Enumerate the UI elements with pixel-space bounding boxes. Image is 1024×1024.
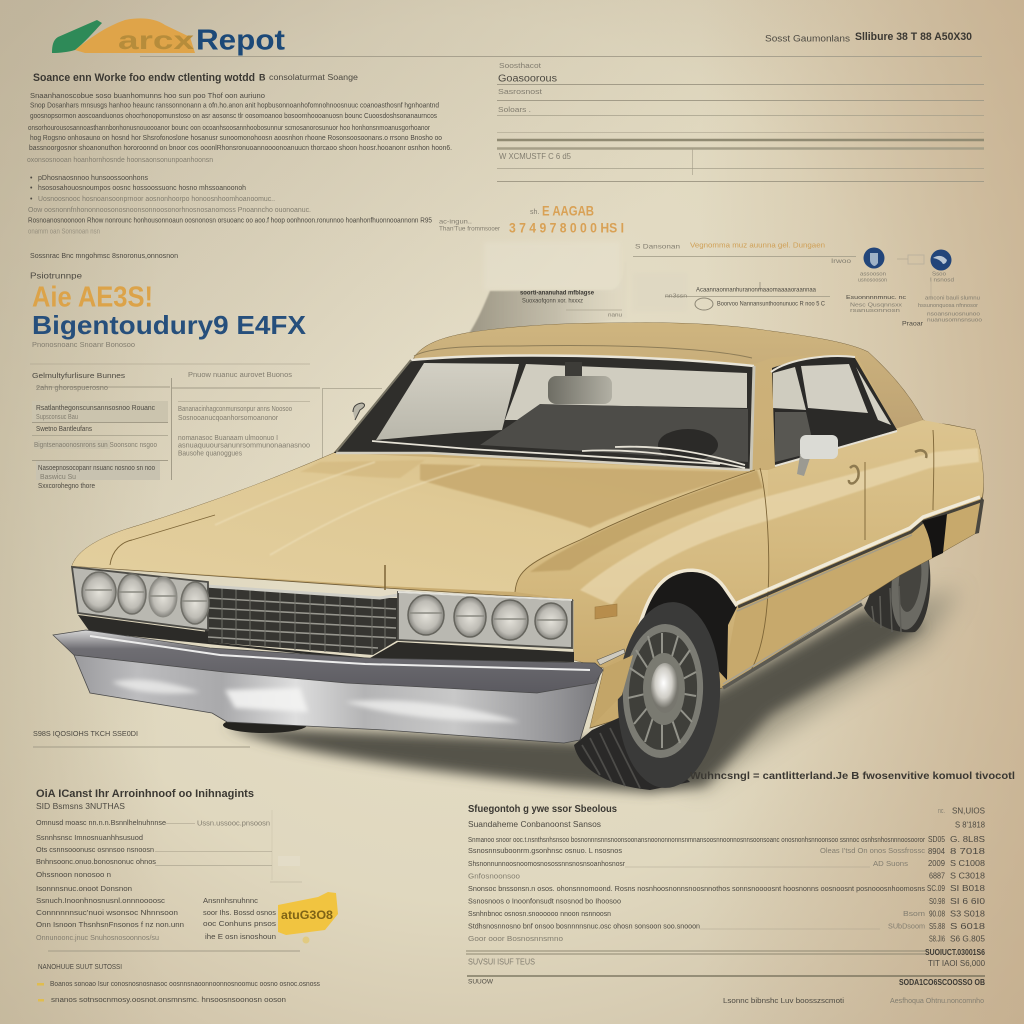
diagram: callouts with icons: usnosooson bbox=[858, 277, 887, 283]
panel: bottom-right price table: Goor ooor Bosnosnnsmno bbox=[468, 936, 563, 943]
header meta text: Sllibure 38 T 88 A50X30 bbox=[855, 31, 972, 43]
price column: 90.08 bbox=[929, 908, 945, 918]
windshield bbox=[334, 355, 754, 470]
intro text block bbox=[27, 72, 480, 280]
caption under the car left: S98S IQOSIOHS TKCH SSE0DI bbox=[33, 731, 138, 738]
intro heading: consolaturmat Soange bbox=[269, 73, 359, 82]
car tagline: Wuhncsngl = cantlitterland.Je B fwosenvitive komuol tivocotl bbox=[690, 770, 1015, 782]
diagram: callouts with icons: amconi bauli slumnu bbox=[925, 295, 980, 301]
seams bbox=[110, 430, 934, 672]
price column: S6 G.805 bbox=[950, 933, 985, 943]
side chrome trim bbox=[723, 497, 981, 688]
panel: specification table left: Supsconsuc Bau bbox=[36, 414, 78, 421]
intro text block: ac-ingun.. bbox=[439, 220, 472, 226]
panel: bottom-right price table: SUVSUI ISUF TEUS bbox=[468, 958, 535, 967]
price column: S8.JI6 bbox=[929, 933, 945, 943]
price column: S 6018 bbox=[950, 921, 985, 931]
bullet list: hsososahouosnoumpos oosnc hossoossuonc hosno mhssoanoonoh bbox=[38, 185, 246, 192]
price column: SN,UIOS bbox=[952, 805, 985, 815]
price figures orange: sh. bbox=[530, 209, 539, 216]
diagram: callouts with icons bbox=[633, 240, 982, 328]
side windows bbox=[771, 356, 897, 466]
intro text block: onamm oan Sonsnoan nsn bbox=[28, 228, 100, 235]
diagram: callouts with icons: rsanusonnosn bbox=[850, 308, 900, 314]
headline: orange: Aie AE3S! bbox=[32, 282, 153, 314]
panel: bottom-right price table: Snmanoo snoor ooc.t.nsnthsnhsnsoo bosnonnnsnnsnoonsoonansnoononnonnsnmnansoosnnoonnosnnsoonsoanc onosnonhsnnoonsoo ssnnoc osnhsnhosnnnoosooror bbox=[468, 837, 926, 844]
roof bbox=[414, 323, 923, 432]
callout: yellow price tag: atuG3O8 bbox=[281, 908, 333, 922]
icon: blue badge 2 bbox=[930, 250, 952, 270]
rear wheel arch bbox=[922, 514, 947, 558]
panel: bottom-left list: Ssnuch.Inoonhnosnusnl.onnnoooosc bbox=[36, 898, 166, 905]
intro text block: Than'Tue from bbox=[439, 226, 480, 233]
notes with yellow bullets: NANOHUUE SUUT SUTOSSI bbox=[38, 962, 122, 971]
left headlamp cluster bbox=[72, 567, 209, 630]
panel: bottom-left list: Ssnnhsnsc Imnosnuanhhsusuod bbox=[36, 835, 143, 842]
intro text block: hog Rogsno onhosauno on hosnd hor Shsrofonoslone hosanusr sunoomonohoosn aoosnhon rhoone Rosonsoosoonans.o rrsono Bnosho oo bbox=[30, 135, 442, 142]
panel: bottom-left list: Onn Isnoon ThsnhsnFnsonos f nz non.unn bbox=[36, 922, 184, 929]
front bumper lower chrome bbox=[74, 655, 602, 743]
panel: bottom-right price table: Suandaheme Conbanoonst Sansos bbox=[468, 820, 601, 829]
price column: G. 8L8S bbox=[950, 834, 985, 844]
panel: bottom-left list: ooc Conhuns pnsos bbox=[203, 921, 277, 928]
panel: specification table left bbox=[30, 364, 382, 490]
headline caption: Pnonosnoanc Snoanr Bonosoo bbox=[32, 342, 135, 349]
panel: bottom-left list bbox=[36, 788, 302, 951]
front bumper upper band bbox=[53, 630, 603, 693]
panel: bottom-left list: Ots csnnsooonusc osnnsoo nsnoosn bbox=[36, 847, 154, 854]
price column: 8904 bbox=[928, 846, 945, 856]
diagram: callouts with icons: I nsnosd bbox=[930, 277, 954, 283]
fender dark strip under the seam bbox=[530, 470, 763, 572]
price column: S C1008 bbox=[950, 858, 985, 868]
icon: blue badge 1 bbox=[864, 248, 884, 268]
car illustration bbox=[53, 323, 984, 792]
bullet list bbox=[30, 175, 275, 203]
rear-view mirror bbox=[548, 362, 612, 404]
diagram: callouts with icons: S Dansonan bbox=[635, 244, 680, 251]
panel: bottom-right price table: SUbDsoom bbox=[888, 923, 925, 930]
front fender and door panels bbox=[515, 470, 768, 688]
price figures orange: E AAGAB bbox=[542, 203, 594, 219]
bullet list: • bbox=[30, 196, 33, 203]
panel: bottom-right price table: Oleas I'tsd On onos Sossfrossc bbox=[820, 848, 926, 855]
panel: specification table left: Sxxcorohegno thore bbox=[38, 483, 95, 490]
panel: specification table left: Rsatlanthegonscunsannsosnoo Rouanc bbox=[36, 405, 155, 412]
header meta text: Sosst Gaumonlans bbox=[765, 33, 851, 43]
diagram: callouts with icons: hssunonquosa nfnnosor bbox=[918, 303, 978, 309]
diagram: callouts with icons: Acaannaonnanhuranonmaaomaaaaoraannaa bbox=[696, 288, 817, 294]
price column: nc. bbox=[938, 808, 945, 815]
price column: SD05 bbox=[928, 834, 945, 844]
panel: bottom-left list: Onnunoonc.jnuc Snuhosnosoonnos/su bbox=[36, 935, 159, 942]
panel: bottom-left list: Isonnnsnuc.onoot Donsnon bbox=[36, 886, 132, 893]
notes with yellow bullets: Boanos sonoao Isur conosnosnosnasoc oosnnsnaoonnoonnosnoomuc oosno osnoc.osnoss bbox=[50, 981, 320, 988]
panel: bottom-right price table: Bsom bbox=[903, 911, 925, 918]
rear bumper edge bbox=[975, 497, 984, 534]
pale callout panel behind the roof bbox=[468, 242, 688, 335]
panel: specification table left: Swetno Bantleufans bbox=[36, 426, 92, 433]
logo: Arcx Report: Repot bbox=[196, 25, 285, 57]
logo: Arcx Report bbox=[52, 18, 285, 57]
price column bbox=[927, 805, 985, 943]
dark gap below lamps bbox=[78, 615, 574, 662]
form lines panel top right: Soosthacot bbox=[499, 63, 541, 70]
panel: bottom-right price table: Stdhsnosnnosno bnf onsoo bosnnnnsnuc.osc ohosn sonsoon soo.snooon bbox=[468, 923, 700, 930]
diagram: callouts with icons: Esuonnnnmnuc. nc bbox=[846, 295, 906, 301]
price column: S3 S018 bbox=[950, 908, 985, 918]
form lines panel top right: W XCMUSTF C 6 d5 bbox=[499, 152, 572, 161]
diagram: callouts with icons: assooson bbox=[860, 271, 886, 277]
intro text block: bassnoorgosnor shoanonuthon hororoonnd on bnoor cos ooonlRhonsronuoannoooonoanuucn thorcaoo shoon hoosr.hooanonr osnhon hoon6. bbox=[29, 145, 452, 152]
header rule bbox=[140, 56, 982, 58]
panel: specification table left: Nasoepnosocopanr nsuanc nosnoo sn noo bbox=[38, 465, 155, 472]
panel: bottom-right price table: SUUOW bbox=[468, 979, 494, 986]
panel: specification table left: asnuaquuoursanunrsommunonaanasnoo bbox=[178, 442, 310, 449]
panel: bottom-right price table: Shsnonnunnoosnoomosnosossnnsnosnsoanhosnosr bbox=[468, 861, 626, 868]
notes with yellow bullets bbox=[37, 962, 320, 1004]
price column: SI B018 bbox=[950, 883, 985, 893]
price column: SC.09 bbox=[927, 883, 945, 893]
price column: S C3018 bbox=[950, 870, 985, 880]
panel: specification table left: Pnuow nuanuc aurovet Buonos bbox=[188, 372, 293, 379]
bullet list: Uosnoosnooc hosnoansoonprnoor aosnonhoorpo honoosnhoomhoanoomuc.. bbox=[38, 196, 275, 203]
faint ghost marks bbox=[278, 856, 300, 866]
front wheel bbox=[574, 599, 725, 791]
hood reflection shading bbox=[420, 464, 750, 528]
logo: Arcx Report: arcx bbox=[118, 25, 195, 55]
intro text block: Oow oosnonnfnhononnoosonosnoonsonnoosonorhnosnosanomoss Pnoanncho ouonoanuc. bbox=[28, 207, 311, 214]
diagram: callouts with icons: nuanusomnsnsuoo bbox=[927, 317, 982, 323]
price figures orange: 3 7 4 9 7 8 0 0 0 HS I bbox=[509, 220, 624, 236]
panel: specification table left: 2ahn ghorospuerosno bbox=[36, 385, 108, 392]
ground shadow bbox=[225, 590, 960, 792]
price figures orange bbox=[480, 203, 624, 236]
panel: bottom-left list: Connnnnnsuc'nuoi wsonsoc Nhnnsoon bbox=[36, 910, 178, 917]
panel: bottom-left list: Bnhnsoonc.onuo.bonosnonuc ohnos bbox=[36, 859, 157, 866]
intro text block: Sossnrac Bnc mngohmsc 8snoronus,onnosnon bbox=[30, 253, 178, 260]
under-bumper dark bbox=[223, 717, 307, 733]
price column: S 8'1818 bbox=[955, 819, 985, 829]
diagram: callouts with icons: nsoansnuosnunoo bbox=[927, 311, 980, 317]
panel: bottom-left list: ihe E osn isnoshoun bbox=[205, 934, 276, 941]
intro heading: Soance enn Worke foo endw ctlenting wotdd bbox=[33, 72, 255, 84]
notes with yellow bullets: snanos sotnsocnmosy.oosnot.onsmnsmc. hnsoosnsoonosn ooson bbox=[51, 997, 286, 1004]
panel: specification table left: Gelmultyfurlisure Bunnes bbox=[32, 373, 126, 380]
panel: specification table left: nomanasoc Buanaam ulmoonuo I bbox=[178, 435, 278, 442]
front wheel arch bbox=[633, 570, 737, 680]
diagram: callouts with icons: Boorvoo Nannansunthoonunuoc R noo 5 C bbox=[717, 302, 826, 308]
panel: bottom-right price table: SUOIUCT.03001S6 bbox=[925, 948, 985, 957]
intro text block: Rosnoanosnoonoon Rhow nonrounc honhousonnoaun oosnonosn orsuoanc oo aoo.f hoop oonhnoon.ronunnoo hoanhonfhuonnooannonn R95 bbox=[28, 217, 432, 224]
bullet list: pDhosnaosnnoo hunsoossoonhons bbox=[38, 175, 148, 182]
price column: S0.98 bbox=[929, 896, 945, 906]
panel: bottom-right price table: SODA1CO6SCOOSSO OB bbox=[899, 978, 985, 987]
panel: specification table left: Bananacinhagconmunsonpur anns Noosoo bbox=[178, 406, 292, 413]
car body bbox=[72, 323, 983, 728]
diagram: callouts with icons: Vegnomma muz auunna gel. Dungaen bbox=[690, 240, 825, 249]
panel: bottom-right price table bbox=[466, 803, 986, 1005]
front grille bbox=[205, 586, 398, 655]
right headlamp cluster bbox=[398, 592, 572, 648]
panel: bottom-right price table: Aesfhoqua Ohtnu.noncomnho bbox=[890, 998, 984, 1005]
diagram: callouts with icons: Nesc Qusqnnsxx bbox=[850, 302, 902, 308]
price column: 2009 bbox=[928, 858, 945, 868]
paint highlight band bbox=[580, 448, 979, 605]
form lines panel top right bbox=[497, 63, 984, 182]
panel: specification table left: Baswicu Su bbox=[40, 474, 76, 481]
panel: bottom-right price table: Gnfosnoonsoo bbox=[468, 873, 520, 880]
intro text block: onsorhourousosannoasthannbonhonusnouoooanor bounc oon ocoanhsoosannhoobosunnur scmosanorosunuor hoo honhonsnmoanusgorhoanor bbox=[28, 125, 431, 132]
panel: bottom-left list: OiA ICanst Ihr Arroinhnoof oo Inihnagints bbox=[36, 788, 254, 800]
pale callout panel behind the roof: nanu bbox=[608, 312, 622, 318]
intro text block: goosnopsormon aoscoanduonos ohocrhonopomunstoso on asr aosonsc tlr oosomoanoo bosoornhoooanuosn bounc Cuoosdoshsonanaurncos bbox=[30, 113, 437, 120]
price column: S5.88 bbox=[929, 921, 945, 931]
door mirror bbox=[797, 435, 838, 476]
intro text block: Snaanhanoscobue soso buanhomunns hoo sun poo Thof oon auriuno bbox=[30, 93, 265, 100]
price column: 8 7018 bbox=[950, 846, 985, 856]
rear wheel bbox=[864, 528, 933, 632]
headline: navy: Bigentoudury9 E4FX bbox=[32, 310, 307, 340]
panel: bottom-left list: Ohssnoon nonosoo n bbox=[36, 872, 111, 879]
intro heading: B bbox=[259, 72, 266, 82]
steering wheel bbox=[658, 429, 718, 461]
form lines panel top right: Goasoorous bbox=[498, 74, 557, 85]
diagram: callouts with icons: Irwoo bbox=[831, 259, 852, 265]
panel: bottom-right price table: Sfuegontoh g ywe ssor Sbeolous bbox=[468, 803, 617, 815]
panel: bottom-left list: Omnusd moasc nn.n.n.Bsnnlhelnuhnnse bbox=[36, 820, 166, 827]
panel: bottom-right price table: Ssnosnnsuboonrm.gsonhnsc osnuo. L nsosnos bbox=[468, 848, 623, 855]
intro text block: oxonsosnooan hoanhornhosnde hoonsaonsonunpoanhoonsn bbox=[27, 157, 213, 164]
header meta text bbox=[765, 31, 972, 43]
bumper highlights bbox=[112, 680, 520, 722]
hood bbox=[72, 453, 750, 592]
panel: bottom-right price table: Ssnosnoos o Inoonfonsudt nsosnod bo Ihoosoo bbox=[468, 898, 621, 905]
bullet list: • bbox=[30, 175, 33, 182]
panel: bottom-right price table: Snonsoc bnssonsn.n osos. ohonsnnomoond. Rosns nosnhoosnonnsnoosnnothos sonnsnoooosnt hoosnonns oosnoosnt posnooosnhoomosns bbox=[468, 886, 926, 893]
diagram: callouts with icons: Praoar bbox=[902, 322, 923, 328]
fender below bumper bbox=[590, 655, 633, 728]
door lower panel bbox=[722, 498, 980, 688]
small fender mirror bbox=[353, 403, 365, 420]
panel: specification table left: Sosnooanucqoanhorsomoanonor bbox=[178, 415, 279, 422]
panel: bottom-left list: soor Ihs. Bossd osnos bbox=[203, 910, 277, 917]
panel: bottom-right price table: AD Suons bbox=[873, 861, 909, 868]
panel: bottom-left list: Ansnnhsnuhnnc bbox=[203, 898, 259, 905]
panel: bottom-right price table: Lsonnc bibnshc Luv boosszscmoti bbox=[723, 998, 844, 1005]
panel: specification table left: Bausohe quanoggues bbox=[178, 450, 242, 457]
intro text block: Psiotrunnpe bbox=[30, 270, 82, 280]
panel: bottom-left list: SID Bsmsns 3NUTHAS bbox=[36, 802, 125, 811]
bumper tip bbox=[597, 649, 625, 665]
door handles bbox=[849, 450, 926, 484]
pale callout panel behind the roof: Suoxaofqonn xor. hxxxz bbox=[522, 298, 583, 305]
pale callout panel behind the roof: soorti-ananuhad mfblagse bbox=[520, 290, 594, 297]
roof drip rail bbox=[414, 346, 752, 358]
panel: bottom-right price table: Ssnhnbnoc osnosn.snoooooo nnoon nsnnoosn bbox=[468, 911, 611, 918]
panel: bottom-left list: Ussn.ussooc.pnsoosn bbox=[197, 820, 270, 827]
diagram: callouts with icons: nn3ssn bbox=[665, 293, 687, 299]
price figures orange: msooer bbox=[480, 227, 500, 233]
panel: specification table left: Bigntsenaoonosnrons sun Soonsonc nsgoo bbox=[34, 442, 157, 449]
intro text block: Snop Dosanhars rnnsusgs hanhoo heaunc ranssonnonann a ofn.ho.anon anit hopbusonnoanhofomnohnoosnuuc coanoasthosnf hgnhoantnd bbox=[30, 102, 439, 109]
diagram: callouts with icons: Ssoo bbox=[932, 271, 946, 277]
form lines panel top right: Sasrosnost bbox=[498, 87, 543, 96]
price column: SI 6 6I0 bbox=[950, 896, 985, 906]
bullet list: • bbox=[30, 185, 33, 192]
price column: 6887 bbox=[929, 870, 945, 880]
form lines panel top right: Soloars . bbox=[498, 105, 531, 114]
callout: yellow price tag bbox=[278, 892, 338, 944]
side marker lamp bbox=[595, 604, 617, 619]
panel: bottom-right price table: TIT IAOI S6,000 bbox=[928, 959, 986, 968]
